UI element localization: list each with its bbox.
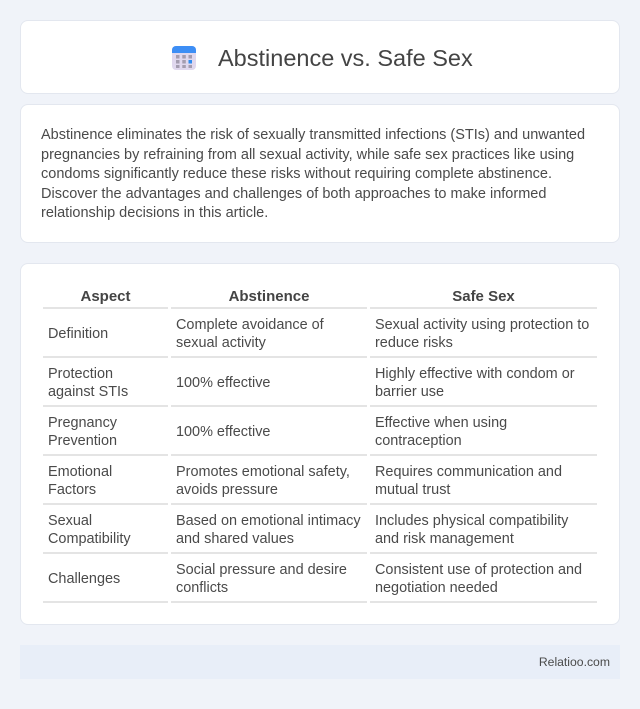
row: protection: Protection — [48, 366, 113, 382]
intro text — [41, 127, 585, 221]
intro text: pregnancies by refraining from all sexual activity, while safe sex practices like using — [41, 146, 574, 162]
row: challenges: conflicts — [176, 580, 228, 596]
row: challenges: Social pressure and desire — [176, 562, 347, 578]
row: emotional: Emotional — [48, 464, 112, 480]
row: pregnancy: Effective when using — [375, 415, 507, 431]
intro text: relationship decisions in this article. — [41, 205, 268, 221]
intro panel — [20, 104, 620, 243]
row: emotional: Promotes emotional safety, — [176, 464, 350, 480]
comparison table — [43, 288, 597, 603]
column headings — [80, 288, 515, 305]
footer bar — [20, 645, 620, 679]
row: protection — [48, 366, 575, 400]
title: Abstinence vs. Safe Sex — [218, 45, 473, 71]
footer brand: Relatioo.com — [539, 655, 610, 669]
row: definition — [48, 317, 589, 351]
intro text: condoms significantly reduce these risks without requiring complete abstinence. — [41, 166, 552, 182]
icon: calendar — [172, 46, 196, 70]
row: challenges: Challenges — [48, 571, 120, 587]
row: definition: Sexual activity using protection to — [375, 317, 589, 333]
row: compatibility — [48, 513, 568, 547]
row: compatibility: Includes physical compatibility — [375, 513, 568, 529]
table panel — [20, 263, 620, 625]
row: compatibility: Compatibility — [48, 531, 131, 547]
row: pregnancy: Pregnancy — [48, 415, 117, 431]
row: compatibility: Sexual — [48, 513, 92, 529]
row: pregnancy — [48, 415, 507, 449]
row: emotional: Factors — [48, 482, 96, 498]
row: definition: reduce risks — [375, 335, 453, 351]
row: challenges: Consistent use of protection and — [375, 562, 582, 578]
row: emotional: avoids pressure — [176, 482, 278, 498]
row: emotional — [48, 464, 562, 498]
row: protection: against STIs — [48, 384, 128, 400]
row: challenges — [48, 562, 582, 596]
row: pregnancy: 100% effective — [176, 424, 270, 440]
row: definition: Complete avoidance of — [176, 317, 324, 333]
column headings: Safe Sex — [452, 288, 515, 305]
row: pregnancy: contraception — [375, 433, 462, 449]
row: emotional: mutual trust — [375, 482, 450, 498]
column headings: Abstinence — [229, 288, 309, 305]
row: pregnancy: Prevention — [48, 433, 117, 449]
row: compatibility: and risk management — [375, 531, 514, 547]
row: compatibility: Based on emotional intimacy — [176, 513, 361, 529]
row: protection: barrier use — [375, 384, 444, 400]
row: challenges: negotiation needed — [375, 580, 498, 596]
row: definition: Definition — [48, 326, 108, 342]
intro text: Abstinence eliminates the risk of sexually transmitted infections (STIs) and unwanted — [41, 127, 585, 143]
column headings: Aspect — [80, 288, 131, 305]
header panel — [20, 20, 620, 94]
row: compatibility: and shared values — [176, 531, 294, 547]
intro text: Discover the advantages and challenges of both approaches to make informed — [41, 186, 546, 202]
row: protection: 100% effective — [176, 375, 270, 391]
row: definition: sexual activity — [176, 335, 266, 351]
row: protection: Highly effective with condom or — [375, 366, 575, 382]
row: emotional: Requires communication and — [375, 464, 562, 480]
